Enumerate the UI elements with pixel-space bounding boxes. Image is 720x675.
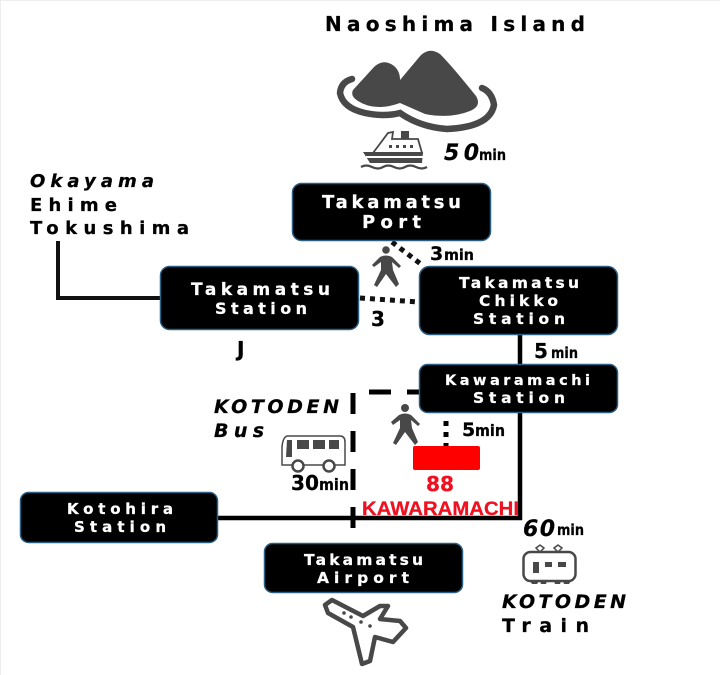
label: KOTODEN Bus: Bus (214, 420, 264, 442)
line: train line to Kotohira (218, 335, 520, 518)
label: 50 min (444, 141, 506, 166)
label: 60min (523, 517, 584, 542)
marker: 88 Kawaramachi red block (413, 446, 480, 470)
label: 5min near 88 (462, 419, 505, 441)
line: dotted walk Port to Chikko (392, 242, 422, 265)
label: 5min near 88: 5 (462, 419, 475, 441)
station: Takamatsu Airport: Airport (317, 569, 410, 587)
label: 5min near 88: min (475, 421, 505, 440)
label: KOTODEN Train: Train (502, 615, 589, 637)
label: 30min (291, 471, 349, 495)
label: Okayama Ehime Tokushima: Okayama (30, 171, 154, 192)
label: 3min: 3 (430, 243, 443, 265)
line: dotted walk Station to Chikko (360, 298, 419, 302)
line: dotted walk to 88 (444, 421, 448, 446)
icon: bus (282, 436, 345, 472)
station: Kawaramachi Station: Kawaramachi (445, 373, 590, 389)
label: 30min: 30 (291, 471, 319, 495)
label: KOTODEN Train: KOTODEN (502, 591, 626, 613)
label: 50 min: min (479, 146, 506, 164)
label: 5min Chikko to Kawaramachi (534, 339, 578, 363)
label: 3: 3 (371, 307, 385, 331)
line: dashed bus route (350, 393, 356, 529)
station: Kawaramachi Station (420, 364, 618, 412)
station: Takamatsu Station: Station (215, 299, 307, 318)
station: Takamatsu Chikko Station (420, 266, 618, 334)
label: KOTODEN Bus: KOTODEN (214, 396, 339, 418)
title: Naoshima Island: Naoshima Island (325, 12, 585, 36)
label: KOTODEN Bus (214, 396, 339, 442)
icon: ferry (361, 131, 427, 168)
station: Kawaramachi Station: Station (473, 389, 565, 407)
label: 30min: min (319, 475, 349, 494)
station: Takamatsu Port: Port (362, 212, 421, 233)
station: Takamatsu Chikko Station: Takamatsu (459, 274, 579, 292)
label: 50 min: 50 (444, 141, 479, 166)
label: 60min: 60 (523, 517, 555, 542)
icon: train (524, 545, 576, 584)
label: 3min (430, 243, 474, 265)
station: Takamatsu Chikko Station: Station (473, 310, 565, 328)
icon: walking person near Kawaramachi (391, 404, 420, 445)
label: 5min Chikko to Kawaramachi: min (551, 344, 578, 362)
label: Okayama Ehime Tokushima (30, 171, 189, 239)
station: Takamatsu Airport: Takamatsu (304, 551, 423, 569)
label: 88: 88 (426, 472, 454, 496)
icon: airplane (325, 600, 406, 664)
station: Takamatsu Chikko Station: Chikko (479, 292, 558, 310)
label: KAWARAMACHI: KAWARAMACHI (362, 499, 519, 520)
station: Takamatsu Airport (264, 544, 462, 592)
line: regional JR line (58, 241, 160, 298)
station: Takamatsu Station (160, 266, 358, 330)
label: 5min Chikko to Kawaramachi: 5 (534, 339, 548, 363)
label: 60min: min (557, 521, 584, 539)
label: Okayama Ehime Tokushima: Ehime (30, 195, 117, 216)
icon: walking person near Port (372, 246, 401, 287)
line: dashed bus route to Kawaramachi (369, 390, 419, 394)
label: J: J (235, 337, 244, 361)
station: Kotohira Station (20, 492, 218, 542)
station: Kotohira Station: Station (74, 518, 166, 536)
icon: island (340, 51, 494, 129)
station: Takamatsu Port (292, 184, 490, 240)
label: 3min: min (444, 246, 474, 264)
station: Takamatsu Station: Takamatsu (191, 280, 330, 300)
station: Kotohira Station: Kotohira (67, 500, 173, 518)
label: KOTODEN Train (502, 591, 626, 637)
label: Okayama Ehime Tokushima: Tokushima (30, 218, 189, 239)
station: Takamatsu Port: Takamatsu (322, 192, 461, 213)
